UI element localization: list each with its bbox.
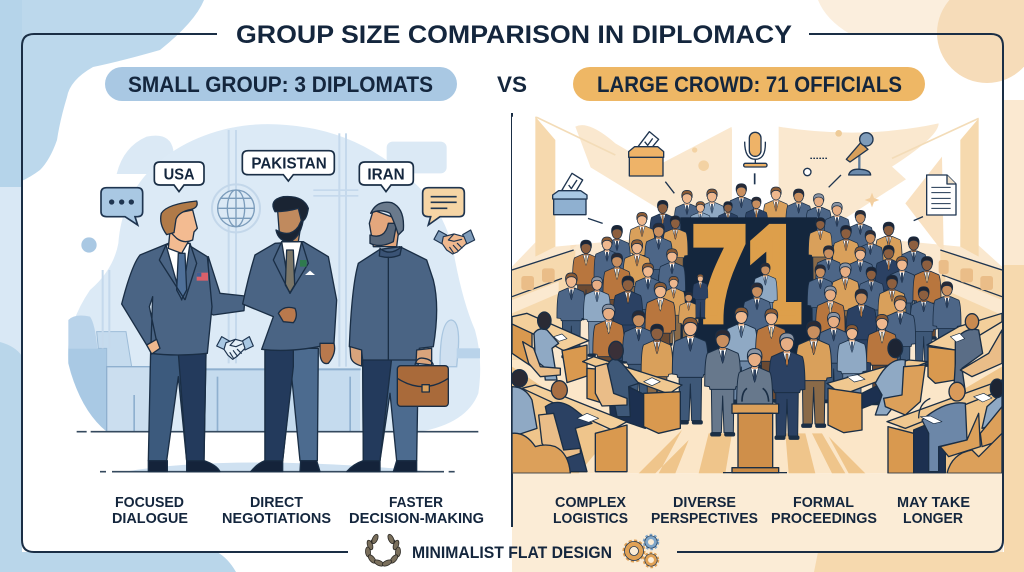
icon: ballot box tan: [629, 132, 664, 176]
icon: accent dot: [81, 237, 97, 253]
caption: focused dialogue: DIALOGUE: [112, 510, 188, 527]
caption: diverse perspectives: [651, 494, 758, 527]
big number panel: 71: [692, 200, 801, 349]
desk: lower left: [511, 370, 627, 473]
desk: centre right: [827, 339, 929, 433]
caption: faster decision-making: DECISION-MAKING: [349, 510, 484, 527]
icon: briefcase: [397, 358, 448, 406]
desk: upper right: [927, 313, 1002, 392]
label: USA: USA: [164, 166, 195, 183]
caption: complex logistics: COMPLEX: [555, 494, 626, 511]
centre divider: [511, 113, 513, 527]
footer label: MINIMALIST FLAT DESIGN: [412, 544, 612, 562]
icon: stand microphone: [804, 133, 873, 176]
label: IRAN: [359, 162, 413, 192]
panel: small group scene: [68, 124, 480, 472]
icon: document: [927, 175, 956, 215]
caption: diverse perspectives: DIVERSE: [673, 494, 736, 511]
captions: large crowd: [553, 494, 970, 527]
heading: small group: SMALL GROUP: 3 DIPLOMATS: [128, 72, 433, 97]
captions: small group: [112, 494, 484, 527]
label: IRAN: IRAN: [367, 166, 405, 183]
figure: Iran diplomat: [347, 202, 437, 472]
panel: large crowd scene: [511, 117, 1004, 473]
big number panel: [680, 217, 817, 354]
crowd of officials: [557, 210, 961, 439]
caption: may take longer: [897, 494, 970, 527]
caption: focused dialogue: FOCUSED: [115, 494, 184, 511]
desk: upper left: [512, 312, 589, 383]
floor: [512, 360, 1002, 473]
caption: focused dialogue: [112, 494, 188, 527]
caption: direct negotiations: NEGOTIATIONS: [222, 510, 331, 527]
caption: faster decision-making: [349, 494, 484, 527]
connector ticks: [588, 175, 923, 223]
back row of officials: [650, 183, 850, 259]
caption: diverse perspectives: PERSPECTIVES: [651, 510, 758, 527]
figure: USA diplomat: [122, 201, 245, 472]
caption: complex logistics: [553, 494, 628, 527]
heading: VS: VS: [497, 72, 527, 97]
icon: gears: [624, 535, 658, 567]
speaker at podium: [723, 349, 787, 473]
icon: chat bubble lines: [423, 188, 464, 225]
scene backdrop: [68, 124, 480, 472]
desks and seated delegates: [511, 312, 1004, 473]
caption: direct negotiations: DIRECT: [250, 494, 303, 511]
icon: laurel wreath: [365, 533, 401, 567]
heading: small group: [105, 67, 457, 101]
icon: ballot box blue: [553, 173, 587, 215]
icon: handshake top right: [434, 230, 475, 254]
label: USA: [154, 162, 204, 192]
desk: centre left: [583, 341, 682, 433]
icon: globe: [212, 184, 260, 232]
caption: formal proceedings: FORMAL: [793, 494, 854, 511]
desk: lower right: [887, 379, 1004, 473]
seating tiers: [512, 250, 1002, 367]
title: GROUP SIZE COMPARISON IN DIPLOMACY: [236, 21, 792, 49]
figure: Pakistan diplomat: [243, 196, 337, 472]
caption: may take longer: MAY TAKE: [897, 494, 970, 511]
caption: faster decision-making: FASTER: [389, 494, 443, 511]
label: PAKISTAN: [242, 151, 334, 181]
scene backdrop rays: [512, 117, 1002, 473]
icon: table microphone: [744, 132, 767, 184]
caption: direct negotiations: [222, 494, 331, 527]
caption: may take longer: LONGER: [903, 510, 963, 527]
heading: large crowd: [573, 67, 925, 101]
caption: formal proceedings: [771, 494, 877, 527]
icon: chat bubble dots: [101, 188, 143, 225]
caption: complex logistics: LOGISTICS: [553, 510, 628, 527]
heading: large crowd: LARGE CROWD: 71 OFFICIALS: [597, 72, 902, 97]
caption: formal proceedings: PROCEEDINGS: [771, 510, 877, 527]
label: PAKISTAN: PAKISTAN: [251, 155, 327, 172]
icon: handshake centre: [217, 337, 253, 359]
